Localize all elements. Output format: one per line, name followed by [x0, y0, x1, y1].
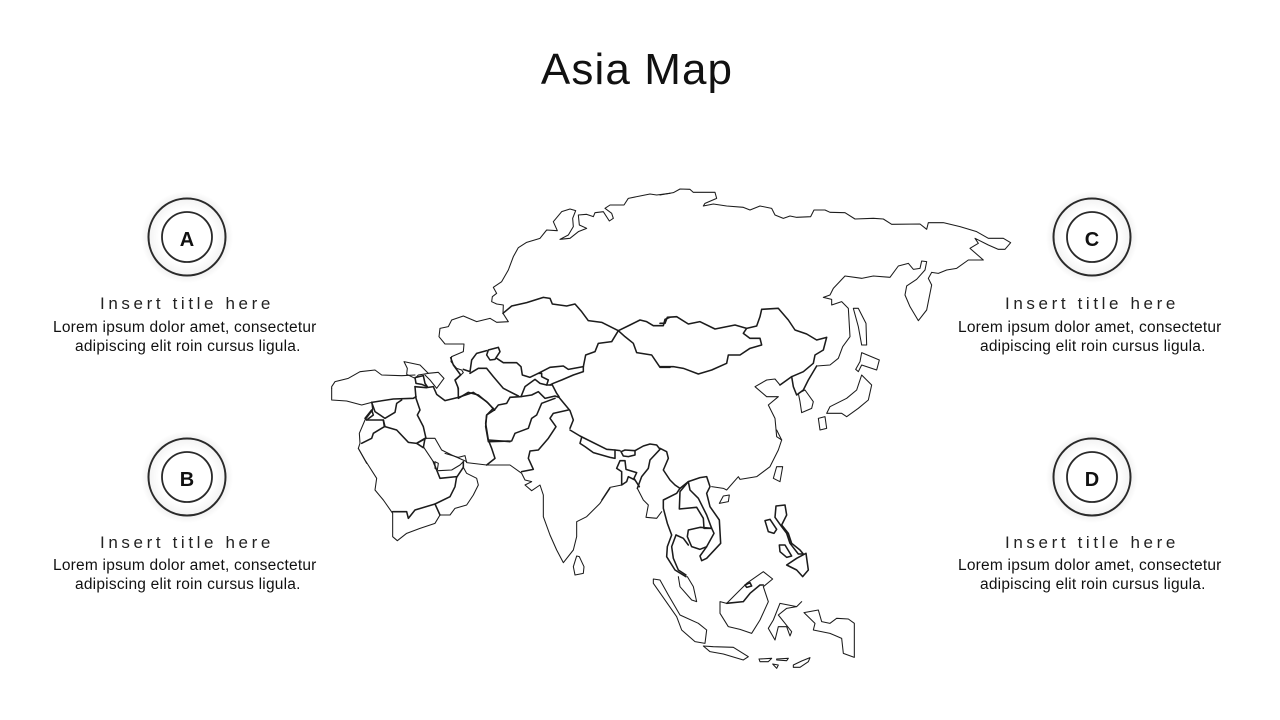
icon: circle A: A [180, 229, 194, 251]
text block A [53, 294, 317, 355]
text block D [958, 533, 1222, 593]
description C line 1: Lorem ipsum dolor amet, consectetur [958, 319, 1222, 336]
map: Nepal, Bangladesh, Myanmar and Indochina [570, 430, 729, 577]
icon: circle A [141, 191, 233, 283]
description D line 1: Lorem ipsum dolor amet, consectetur [958, 557, 1222, 574]
description A line 2: adipiscing elit roin cursus ligula. [75, 338, 301, 355]
title: Asia Map [541, 45, 733, 94]
description B line 2: adipiscing elit roin cursus ligula. [75, 576, 301, 593]
heading C: Insert title here [1005, 294, 1179, 313]
icon: circle C: C [1085, 229, 1099, 251]
map: Central Asia [451, 347, 583, 442]
icon: circle B [141, 431, 233, 523]
icon: circle C [1046, 191, 1138, 283]
text block C [958, 294, 1222, 355]
description D line 2: adipiscing elit roin cursus ligula. [980, 576, 1206, 593]
map: Southeast Asian islands and China coast [653, 430, 854, 668]
text block B [53, 533, 317, 593]
map: Turkey, Caucasus and Levant [332, 358, 495, 463]
icon: circle D: D [1085, 469, 1099, 491]
icon: circle B: B [180, 469, 194, 491]
description B line 1: Lorem ipsum dolor amet, consectetur [53, 557, 317, 574]
icon: circle D [1046, 431, 1138, 523]
heading A: Insert title here [100, 294, 274, 313]
map: Far East, China east, Korea and Japan [660, 189, 1011, 440]
description A line 1: Lorem ipsum dolor amet, consectetur [53, 319, 317, 336]
map: north Asia and Kazakhstan [439, 193, 670, 367]
heading B: Insert title here [100, 533, 274, 552]
map: Arabia, Iran, Pakistan and India [358, 408, 610, 563]
description C line 2: adipiscing elit roin cursus ligula. [980, 338, 1206, 355]
heading D: Insert title here [1005, 533, 1179, 552]
